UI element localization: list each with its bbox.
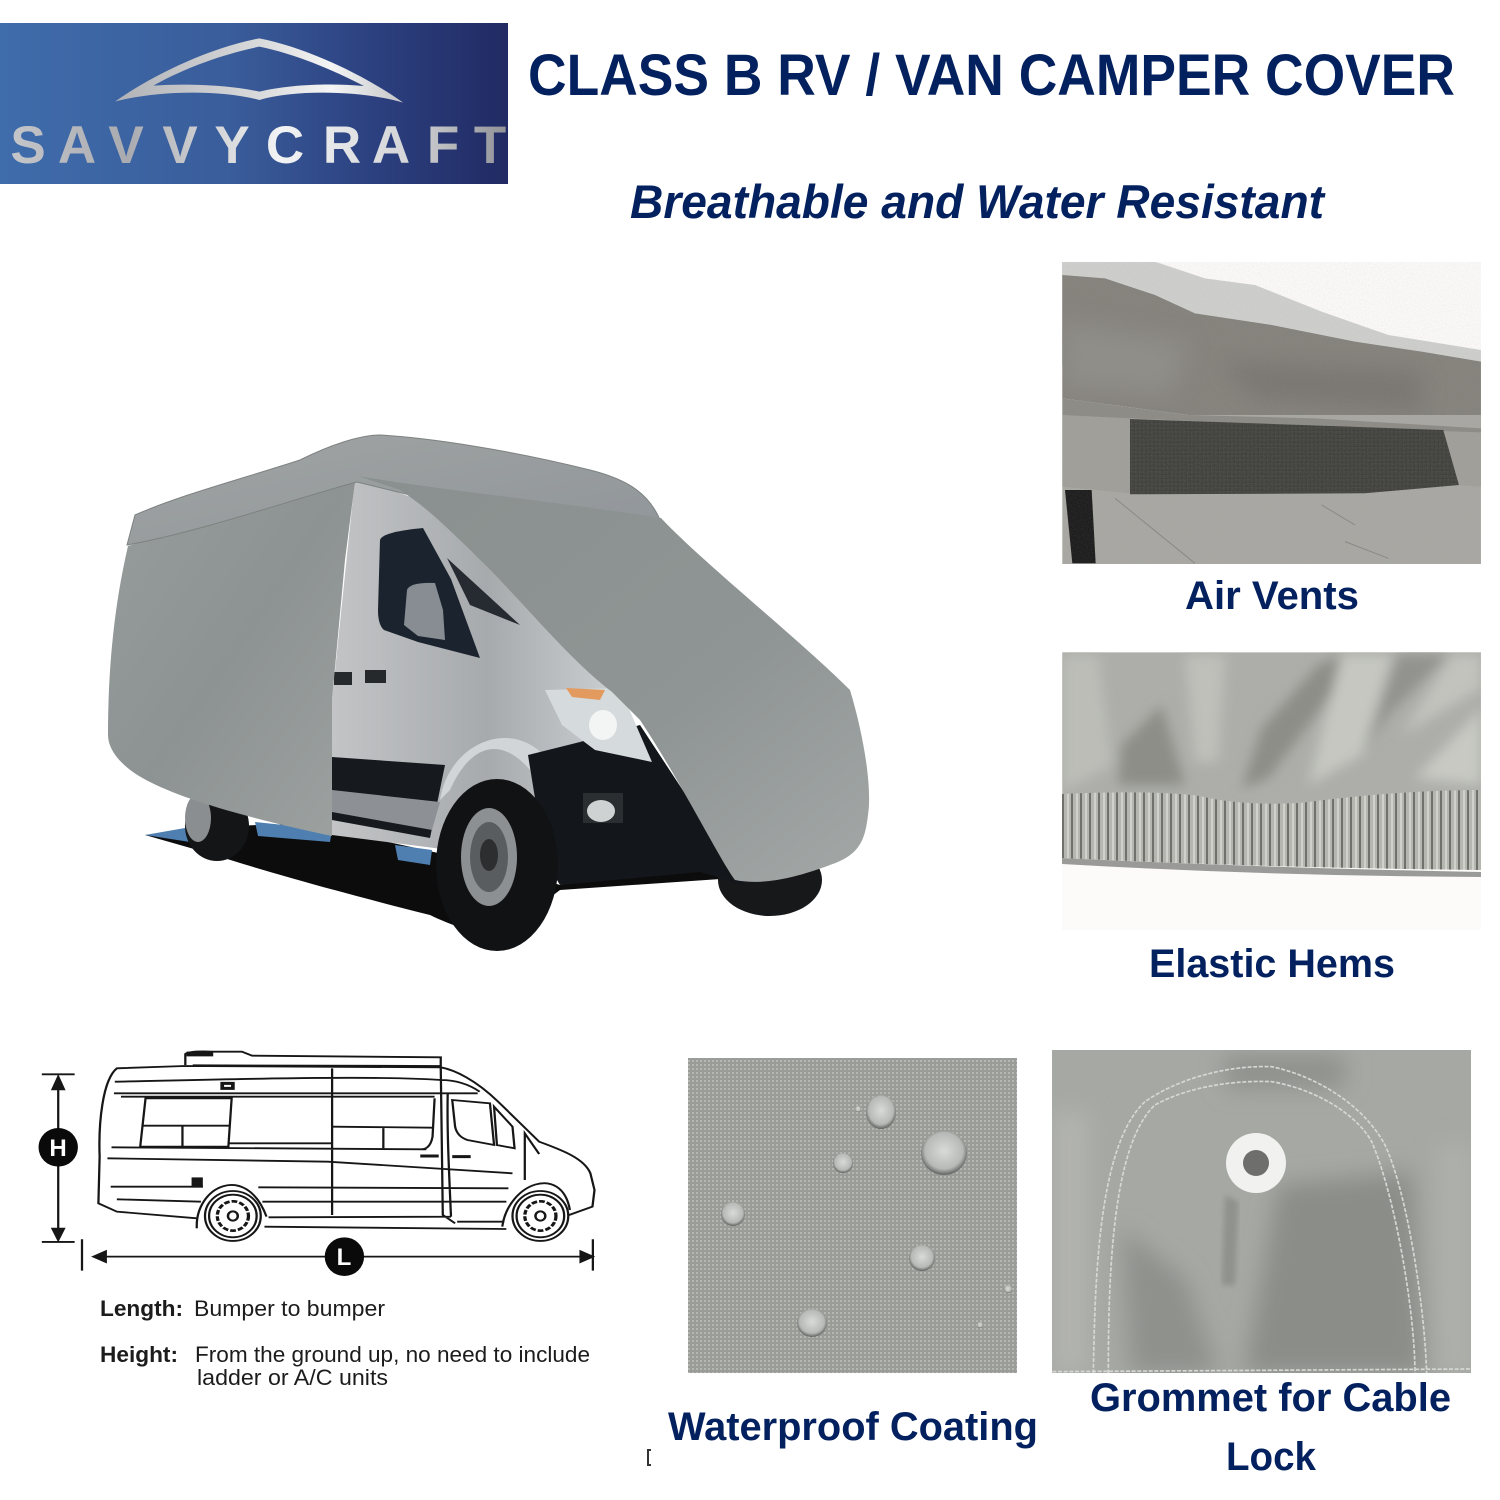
photo: waterproof coating bbox=[688, 1058, 1017, 1373]
label: air vents: Air Vents bbox=[1185, 574, 1359, 618]
front wheel bbox=[436, 779, 558, 951]
stray mark bbox=[648, 1450, 651, 1465]
measurement text: Height: bbox=[100, 1342, 178, 1367]
logo wordmark: V bbox=[108, 116, 144, 175]
door handles bbox=[334, 670, 386, 685]
label: elastic hems: Elastic Hems bbox=[1149, 942, 1395, 986]
logo wordmark: V bbox=[162, 116, 198, 175]
water droplets bbox=[721, 1095, 1012, 1337]
stitching bbox=[1052, 1067, 1471, 1373]
mesh vent bbox=[1130, 419, 1459, 494]
black strap bbox=[1065, 490, 1096, 563]
headlight bbox=[545, 688, 652, 762]
subtitle: Breathable and Water Resistant bbox=[630, 175, 1326, 228]
measurement text: Length: bbox=[100, 1296, 183, 1321]
dimension letter H: H bbox=[49, 1135, 67, 1162]
fabric shading bbox=[1058, 1050, 1427, 1373]
dark inner lining bbox=[1062, 275, 1481, 435]
measurement text: From the ground up, no need to include bbox=[195, 1342, 590, 1367]
label: grommet for cable lock: Lock bbox=[1226, 1435, 1317, 1479]
measurement text: Bumper to bumper bbox=[194, 1296, 385, 1321]
cover: roof bbox=[127, 435, 661, 545]
roof rack bbox=[185, 1051, 441, 1066]
length dimension bbox=[82, 1237, 593, 1276]
logo wordmark: S bbox=[10, 116, 46, 175]
gathered elastic band bbox=[1062, 790, 1481, 870]
grommet bbox=[1226, 1133, 1286, 1193]
wheel arch highlight bbox=[440, 738, 560, 800]
diagram: van dimensions bbox=[39, 1051, 595, 1276]
label: grommet for cable lock bbox=[1090, 1376, 1451, 1479]
logo wordmark: T bbox=[474, 116, 506, 175]
fabric folds bbox=[1062, 655, 1481, 792]
door handles and fittings bbox=[222, 1083, 471, 1157]
icon: logo roof mark bbox=[115, 38, 403, 103]
lower skirt bbox=[1062, 415, 1481, 565]
photo: elastic hems bbox=[1062, 652, 1481, 877]
logo wordmark: C bbox=[266, 116, 304, 175]
windows bbox=[140, 1098, 515, 1149]
windscreen bbox=[447, 558, 520, 625]
height dimension bbox=[39, 1074, 78, 1242]
light outer fabric edge bbox=[1055, 262, 1481, 365]
far front tyre bbox=[718, 844, 822, 916]
measurement text bbox=[100, 1296, 590, 1390]
photo: covered van bbox=[108, 435, 869, 951]
logo wordmark: A bbox=[372, 116, 410, 175]
wheel arches bbox=[197, 1183, 570, 1228]
flap hem bbox=[1062, 398, 1481, 432]
side window bbox=[378, 528, 480, 658]
body lines bbox=[107, 1067, 513, 1229]
fog light bbox=[583, 793, 623, 823]
van outline bbox=[98, 1066, 595, 1218]
bumper bbox=[528, 725, 745, 885]
rear wheel bbox=[185, 791, 249, 861]
ground shadow bbox=[145, 825, 735, 935]
logo wordmark: A bbox=[58, 116, 96, 175]
crease bbox=[1222, 1195, 1238, 1285]
van body bbox=[332, 478, 720, 880]
label: grommet for cable lock: Grommet for Cable bbox=[1090, 1376, 1451, 1420]
mirror bbox=[404, 583, 445, 640]
photo: air vents bbox=[1055, 262, 1481, 565]
cover: front panel bbox=[358, 476, 869, 882]
wheels bbox=[205, 1191, 568, 1241]
photo: grommet bbox=[1052, 1050, 1471, 1373]
label: waterproof coating: Waterproof Coating bbox=[668, 1405, 1038, 1449]
logo wordmark: R bbox=[323, 116, 361, 175]
dimension letter L: L bbox=[337, 1244, 351, 1271]
measurement text: ladder or A/C units bbox=[197, 1365, 388, 1390]
logo wordmark: Y bbox=[214, 116, 250, 175]
cover: rear side panel bbox=[108, 474, 356, 836]
shadow under hem bbox=[1062, 858, 1481, 877]
logo: Savvycraft bbox=[0, 23, 508, 184]
side flaps bbox=[1062, 415, 1481, 493]
ground light reflections bbox=[145, 822, 432, 865]
lower sill bbox=[332, 757, 445, 838]
logo wordmark: F bbox=[427, 116, 459, 175]
